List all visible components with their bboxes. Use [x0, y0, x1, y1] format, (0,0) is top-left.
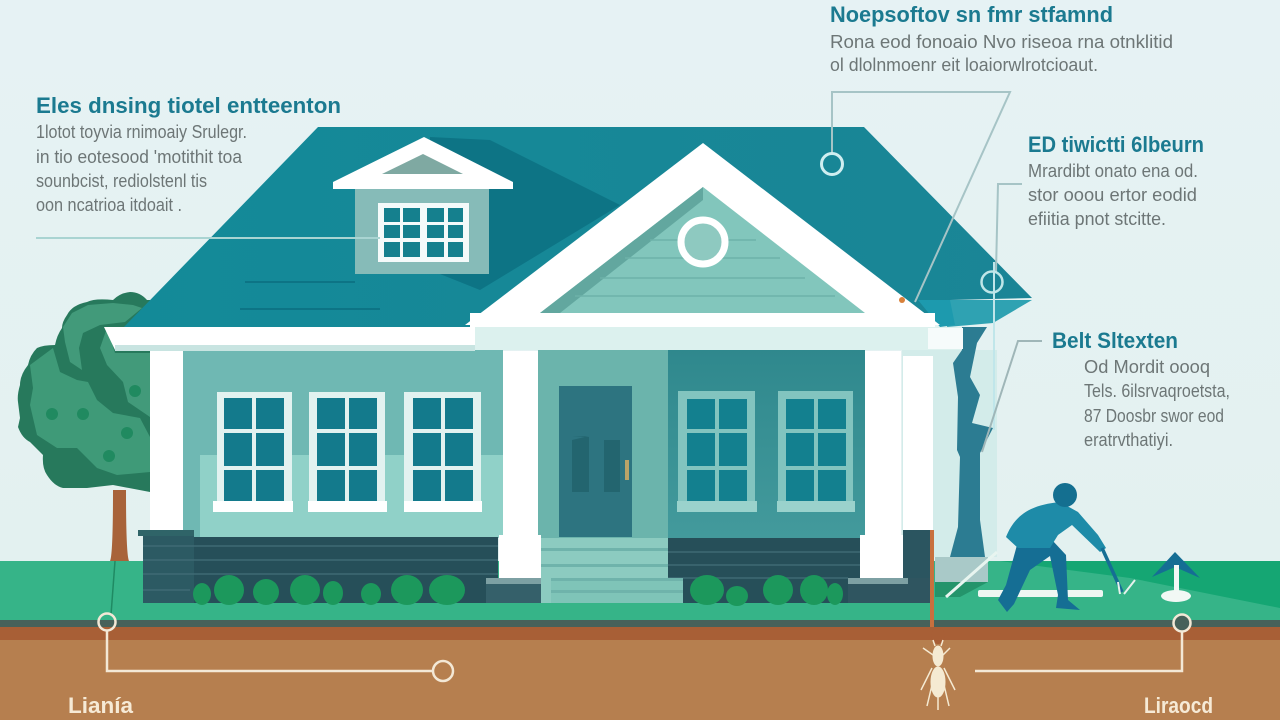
text block: left callout: oon ncatrioa itdoait .	[36, 195, 182, 215]
dormer	[333, 137, 513, 274]
pediment gable	[465, 143, 940, 325]
text block: left callout: 1lotot toyvia rnimoaiy Srulegr.	[36, 122, 247, 142]
eave band	[104, 313, 963, 351]
text block: right callout: ED tiwictti 6lbeurn	[1028, 132, 1204, 157]
columns	[150, 351, 933, 578]
text block: right callout: efiitia pnot stcitte.	[1028, 209, 1166, 229]
termite mud tube	[930, 530, 945, 644]
text block: lower right callout: Tels. 6ilsrvaqroetsta,	[1084, 381, 1230, 401]
callout line: right with marker	[982, 184, 1022, 430]
shrubs	[193, 575, 843, 606]
door	[559, 386, 632, 537]
main roof	[124, 127, 1032, 330]
soil callout right	[975, 614, 1190, 671]
text block: left callout: Eles dnsing tiotel entteenton	[36, 93, 341, 118]
text block: left callout: sounbcist, rediolstenl tis	[36, 171, 207, 191]
left windows	[213, 392, 482, 512]
front steps	[541, 538, 683, 603]
side corner downspout	[935, 327, 993, 597]
person	[998, 483, 1135, 612]
soil callout left	[98, 614, 453, 681]
text block: right callout: Mrardibt onato ena od.	[1028, 161, 1198, 181]
text block: lower right callout: 87 Doosbr swor eod	[1084, 406, 1224, 426]
callout line: lower right	[982, 341, 1042, 452]
callout line: left	[36, 237, 380, 239]
text block: top callout: Rona eod fonoaio Nvo riseoa rna otnklitid	[830, 32, 1173, 52]
text block: top callout	[830, 2, 1173, 75]
callout line: top with marker	[822, 92, 1010, 302]
text block: top callout: Noepsoftov sn fmr stfamnd	[830, 2, 1113, 27]
termite	[921, 640, 955, 710]
text block: lower right callout	[1052, 328, 1230, 450]
text block: lower right callout: eratrvthatiyi.	[1084, 430, 1173, 450]
label: soil left: Lianía	[68, 693, 134, 718]
label: soil right: Liraocd	[1144, 693, 1213, 718]
house walls	[183, 350, 997, 557]
text block: lower right callout: Od Mordit oooq	[1084, 357, 1210, 377]
warning arrow marker	[1152, 552, 1200, 602]
ground layers	[0, 561, 1280, 720]
text block: right callout	[1028, 132, 1204, 229]
text block: left callout: in tio eotesood 'motithit toa	[36, 147, 243, 167]
text block: right callout: stor ooou ertor eodid	[1028, 185, 1197, 205]
right windows	[677, 391, 855, 512]
text block: top callout: ol dlolnmoenr eit loaiorwlrotcioaut.	[830, 55, 1098, 75]
background sky	[0, 0, 1280, 561]
text block: left callout	[36, 93, 341, 215]
text block: lower right callout: Belt Sltexten	[1052, 328, 1178, 353]
tree	[18, 292, 150, 561]
plank and spray	[946, 552, 1103, 597]
foundation	[138, 530, 933, 603]
